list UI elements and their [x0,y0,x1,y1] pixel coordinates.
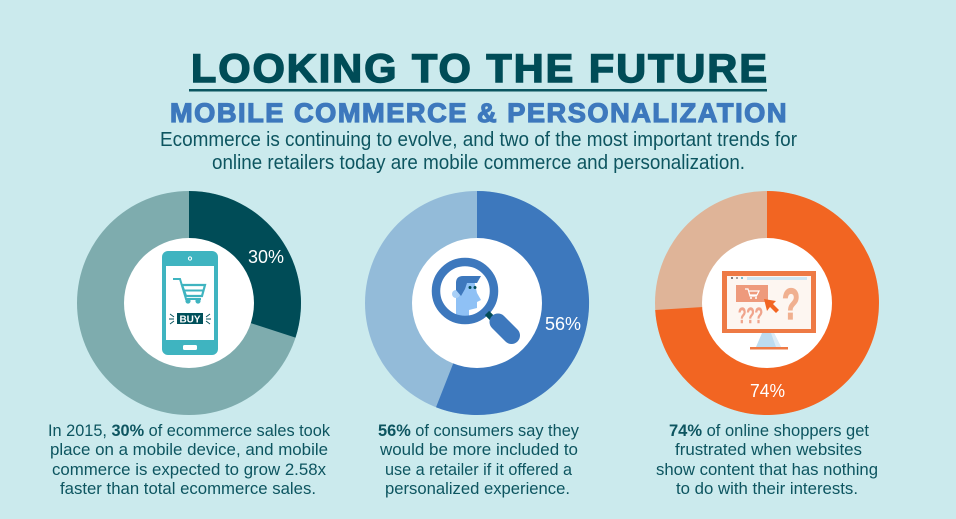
intro text: online retailers today are mobile commerce and personalization. [212,152,745,174]
icon: phone with shopping cart [162,251,218,355]
percentage: 56%: 56% [545,314,581,334]
caption: mobile commerce: place on a mobile device, and mobile [50,441,328,459]
panel: mobile commerce [48,191,331,498]
title: LOOKING TO THE FUTURE [191,47,769,91]
subtitle: MOBILE COMMERCE & PERSONALIZATION [170,98,788,128]
caption: mobile commerce: commerce is expected to grow 2.58x [52,461,327,479]
intro text: Ecommerce is continuing to evolve, and two of the most important trends for [160,129,797,151]
caption: frustrated shoppers: to do with their interests. [676,480,858,498]
caption: personalization [378,422,580,498]
icon: computer monitor with question marks: ? [782,280,800,329]
icon: phone with shopping cart: BUY [179,314,201,326]
title underline [189,89,767,92]
icon: computer monitor with question marks [722,271,816,350]
caption: personalization: use a retailer if it offered a [385,461,573,479]
caption: mobile commerce: faster than total ecommerce sales. [60,480,316,498]
caption: mobile commerce [48,422,331,498]
icon: magnifying glass over face [436,262,512,336]
caption: frustrated shoppers: show content that has nothing [656,461,878,479]
donut chart: 56% [365,191,589,415]
caption: mobile commerce: In 2015, 30% of ecommerce sales took [48,422,331,440]
panel: frustrated shoppers [655,191,879,498]
icon: computer monitor with question marks: ??? [738,303,763,328]
caption: personalization: personalized experience. [385,480,570,498]
caption: frustrated shoppers: 74% of online shoppers get [669,422,869,440]
caption: personalization: would be more included to [379,441,578,459]
donut chart: 74% [655,191,879,415]
donut chart: 30% [77,191,301,415]
panel: personalization [365,191,589,498]
caption: frustrated shoppers: frustrated when websites [675,441,862,459]
caption: personalization: 56% of consumers say they [378,422,580,440]
intro text [160,129,797,174]
percentage: 30%: 30% [248,247,284,267]
percentage: 74%: 74% [750,381,785,401]
caption: frustrated shoppers [656,422,878,498]
